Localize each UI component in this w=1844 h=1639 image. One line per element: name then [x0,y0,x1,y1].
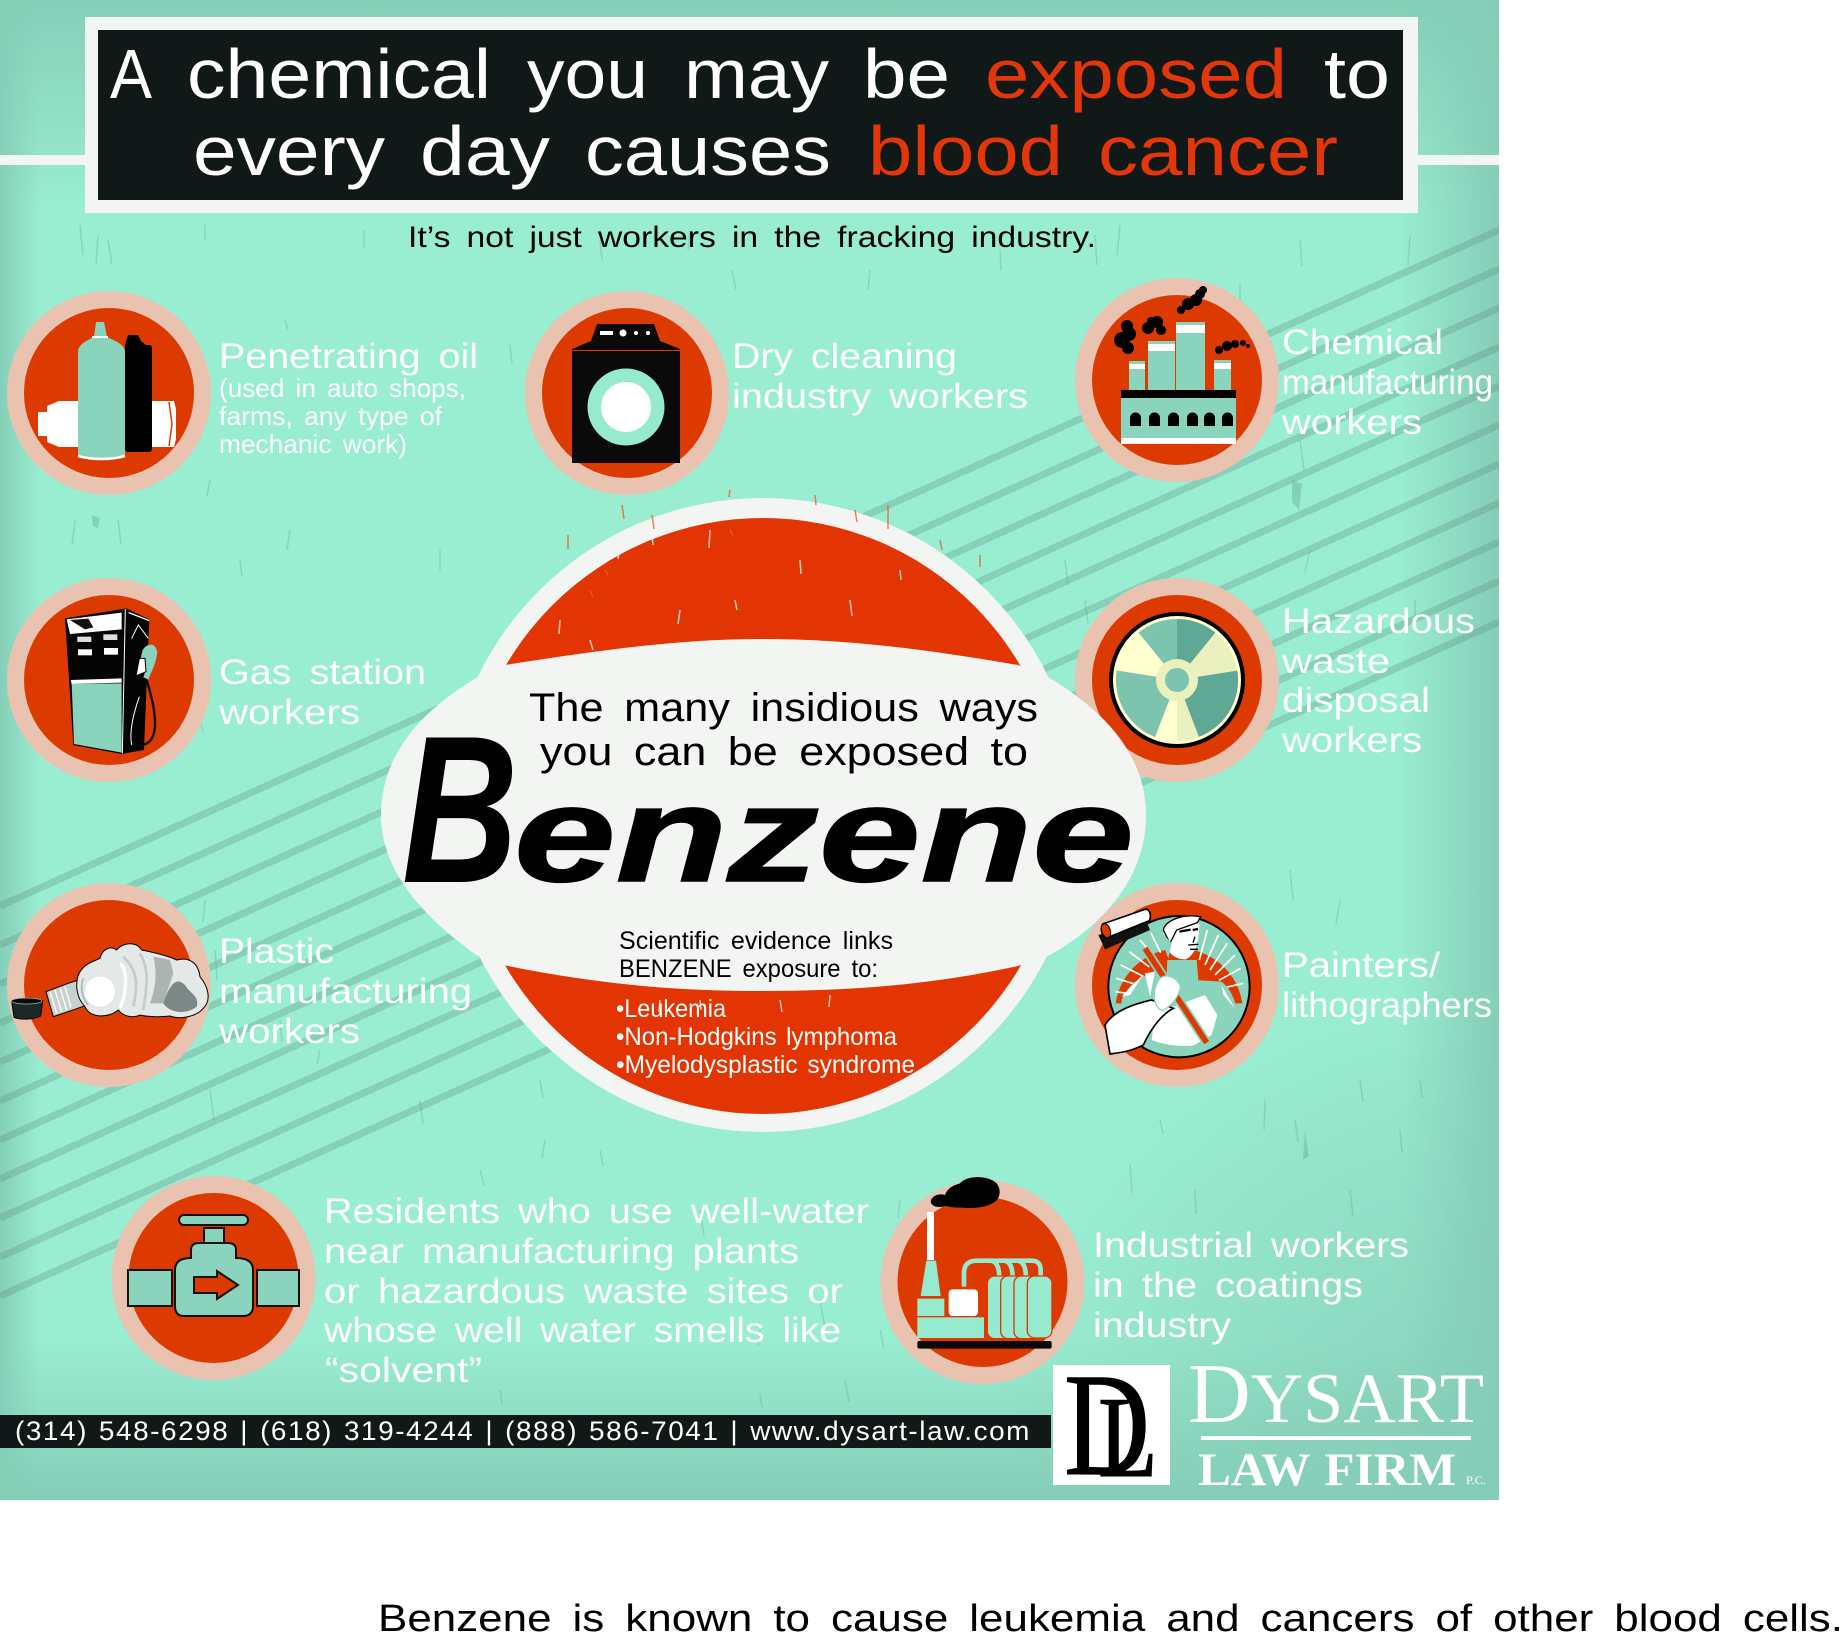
icon: coatings plant [880,1177,1084,1384]
label: residents: or hazardous waste sites or [324,1272,843,1311]
benzene wordmark: enzene [514,758,1134,910]
label: painters [1282,946,1492,1025]
label: dry cleaning: industry workers [732,377,1028,416]
title banner: cancer [1098,112,1338,190]
logo: Dysart Law Firm: D [1064,1343,1150,1506]
background panel [0,0,1499,1500]
logo: Dysart Law Firm [1053,1343,1486,1506]
badge heading: The many insidious ways [529,686,1038,730]
label: painters: lithographers [1282,986,1492,1025]
label: penetrating oil: mechanic work) [219,429,407,459]
title banner: causes [585,112,831,190]
title banner: A [110,35,152,113]
icon: gas pump [7,578,211,782]
diseases list: •Myelodysplastic syndrome [616,1051,915,1079]
logo: Dysart Law Firm: LAW FIRM [1198,1444,1456,1496]
icon: chemical factory [1075,278,1279,482]
benzene wordmark [402,692,1134,927]
evidence text [619,927,893,983]
label: plastic manufacturing [218,932,472,1051]
icon: washing machine [525,291,729,495]
icon: radiation symbol [1075,578,1279,782]
label: hazardous waste [1281,602,1475,760]
label: residents [323,1192,869,1390]
logo: Dysart Law Firm: P.C. [1466,1473,1486,1487]
label: gas station workers: Gas station [219,653,426,692]
title banner: to [1324,35,1390,113]
subtitle: It’s not just workers in the fracking industry. [408,221,1096,254]
label: painters: Painters/ [1282,946,1440,985]
diseases list: •Non-Hodgkins lymphoma [616,1023,897,1051]
label: plastic manufacturing: manufacturing [219,972,472,1011]
label: hazardous waste: waste [1281,642,1390,681]
title banner: chemical [187,35,491,113]
badge heading: you can be exposed to [540,730,1028,774]
title banner: you [527,35,648,113]
evidence text: BENZENE exposure to: [619,955,878,983]
contact bar: (314) 548-6298 | (618) 319-4244 | (888) 586-7041 | www.dysart-law.com [15,1416,1031,1446]
title banner: be [863,35,950,113]
title banner: exposed [985,35,1287,113]
evidence text: Scientific evidence links [619,927,893,955]
title banner: may [684,35,829,113]
diseases list [616,995,915,1079]
title banner [0,17,1499,213]
label: residents: “solvent” [325,1351,482,1390]
diseases list: •Leukemia [616,995,726,1023]
label: chemical manufacturing [1281,323,1493,442]
label: gas station workers: workers [218,693,360,732]
badge heading [529,686,1038,774]
label: hazardous waste: disposal [1282,681,1430,720]
icon: water valve [112,1176,316,1380]
label: chemical manufacturing: Chemical [1282,323,1443,362]
bottom caption: Benzene is known to cause leukemia and cancers of other blood cells. [378,1598,1843,1639]
label: industrial workers: Industrial workers [1093,1226,1409,1265]
label: industrial workers: industry [1093,1306,1232,1345]
icon: painter [1075,883,1279,1087]
label: residents: Residents who use well-water [324,1192,869,1231]
label: residents: whose well water smells like [323,1311,841,1350]
label: industrial workers [1093,1226,1409,1345]
label: dry cleaning [732,337,1028,416]
icon: crumpled plastic bottle [7,883,211,1087]
central benzene badge [381,490,1146,1132]
label: penetrating oil: Penetrating oil [219,337,478,376]
label: chemical manufacturing: manufacturing [1282,363,1493,402]
label: gas station workers [218,653,426,732]
logo: Dysart Law Firm: DYSART [1188,1347,1484,1441]
label: penetrating oil: (used in auto shops, [219,373,466,403]
label: industrial workers: in the coatings [1093,1266,1363,1305]
benzene wordmark: B [402,692,518,927]
label: penetrating oil: farms, any type of [219,401,443,431]
label: hazardous waste: Hazardous [1282,602,1475,641]
title banner: every [193,112,385,190]
label: residents: near manufacturing plants [324,1232,799,1271]
title banner: day [420,112,550,190]
label: plastic manufacturing: Plastic [219,932,334,971]
label: penetrating oil [219,337,478,459]
label: hazardous waste: workers [1281,721,1422,760]
label: chemical manufacturing: workers [1281,403,1422,442]
logo: Dysart Law Firm: L [1098,1374,1158,1502]
icon: spray cans [7,291,211,495]
label: dry cleaning: Dry cleaning [732,337,957,376]
title banner: blood [868,112,1063,190]
label: plastic manufacturing: workers [218,1012,360,1051]
